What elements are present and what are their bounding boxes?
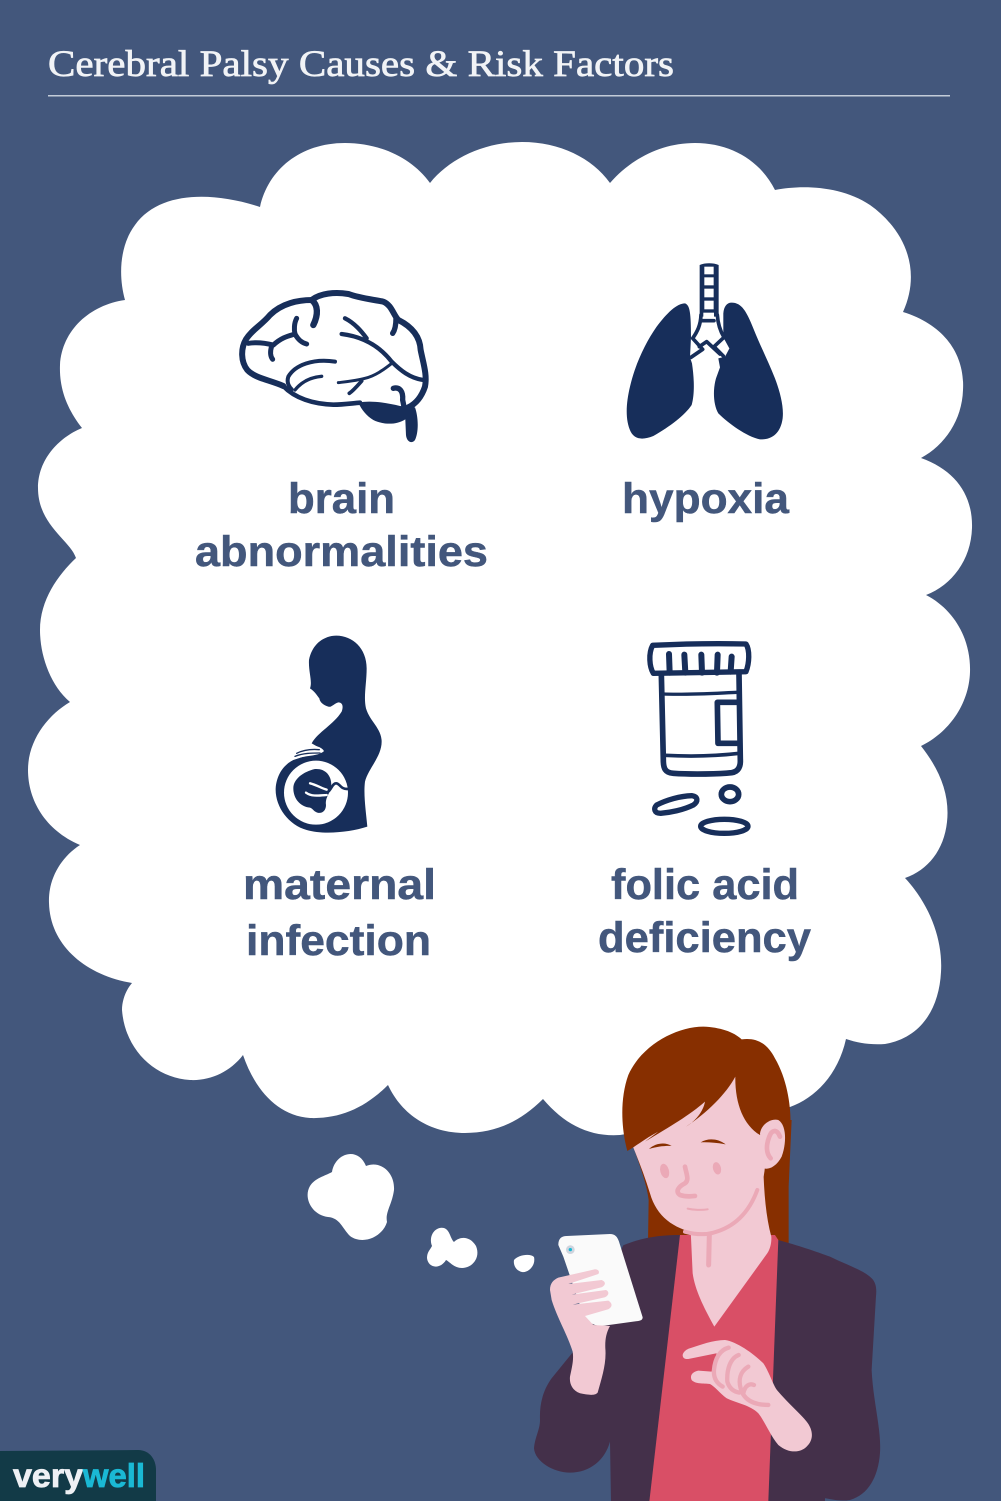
logo: verywell: well [82, 1457, 145, 1494]
label: brain abnormalities: brain [288, 475, 395, 523]
neck and chest [691, 1167, 771, 1327]
label: maternal infection: maternal [243, 861, 436, 909]
label: folic acid deficiency: deficiency [598, 914, 811, 962]
title: Cerebral Palsy Causes & Risk Factors [48, 44, 674, 85]
label: folic acid deficiency [598, 861, 811, 962]
label: brain abnormalities: abnormalities [195, 528, 488, 576]
icon: brain [242, 293, 426, 442]
label: brain abnormalities [195, 475, 488, 576]
label: folic acid deficiency: folic acid [611, 861, 799, 909]
small thought bubbles [308, 1154, 534, 1272]
icon: pregnant woman [276, 636, 382, 833]
left hand [550, 1269, 612, 1395]
thought cloud [28, 142, 972, 1135]
phone [558, 1234, 643, 1326]
icon: lungs [627, 263, 783, 439]
facial features [649, 1139, 726, 1210]
icon: pill bottle [650, 644, 749, 833]
jacket [534, 1235, 880, 1501]
label: maternal infection [243, 861, 436, 965]
woman looking at phone [534, 1027, 880, 1501]
front hair [622, 1027, 791, 1151]
logo: verywell: very [13, 1457, 84, 1494]
right hand [683, 1340, 812, 1451]
logo: verywell [0, 1450, 156, 1501]
fetus [293, 769, 347, 813]
label: maternal infection: infection [246, 917, 431, 965]
shirt [649, 1235, 778, 1501]
face [632, 1073, 765, 1234]
label: hypoxia: hypoxia [622, 475, 790, 523]
back hair [633, 1120, 792, 1243]
ear [760, 1120, 785, 1169]
